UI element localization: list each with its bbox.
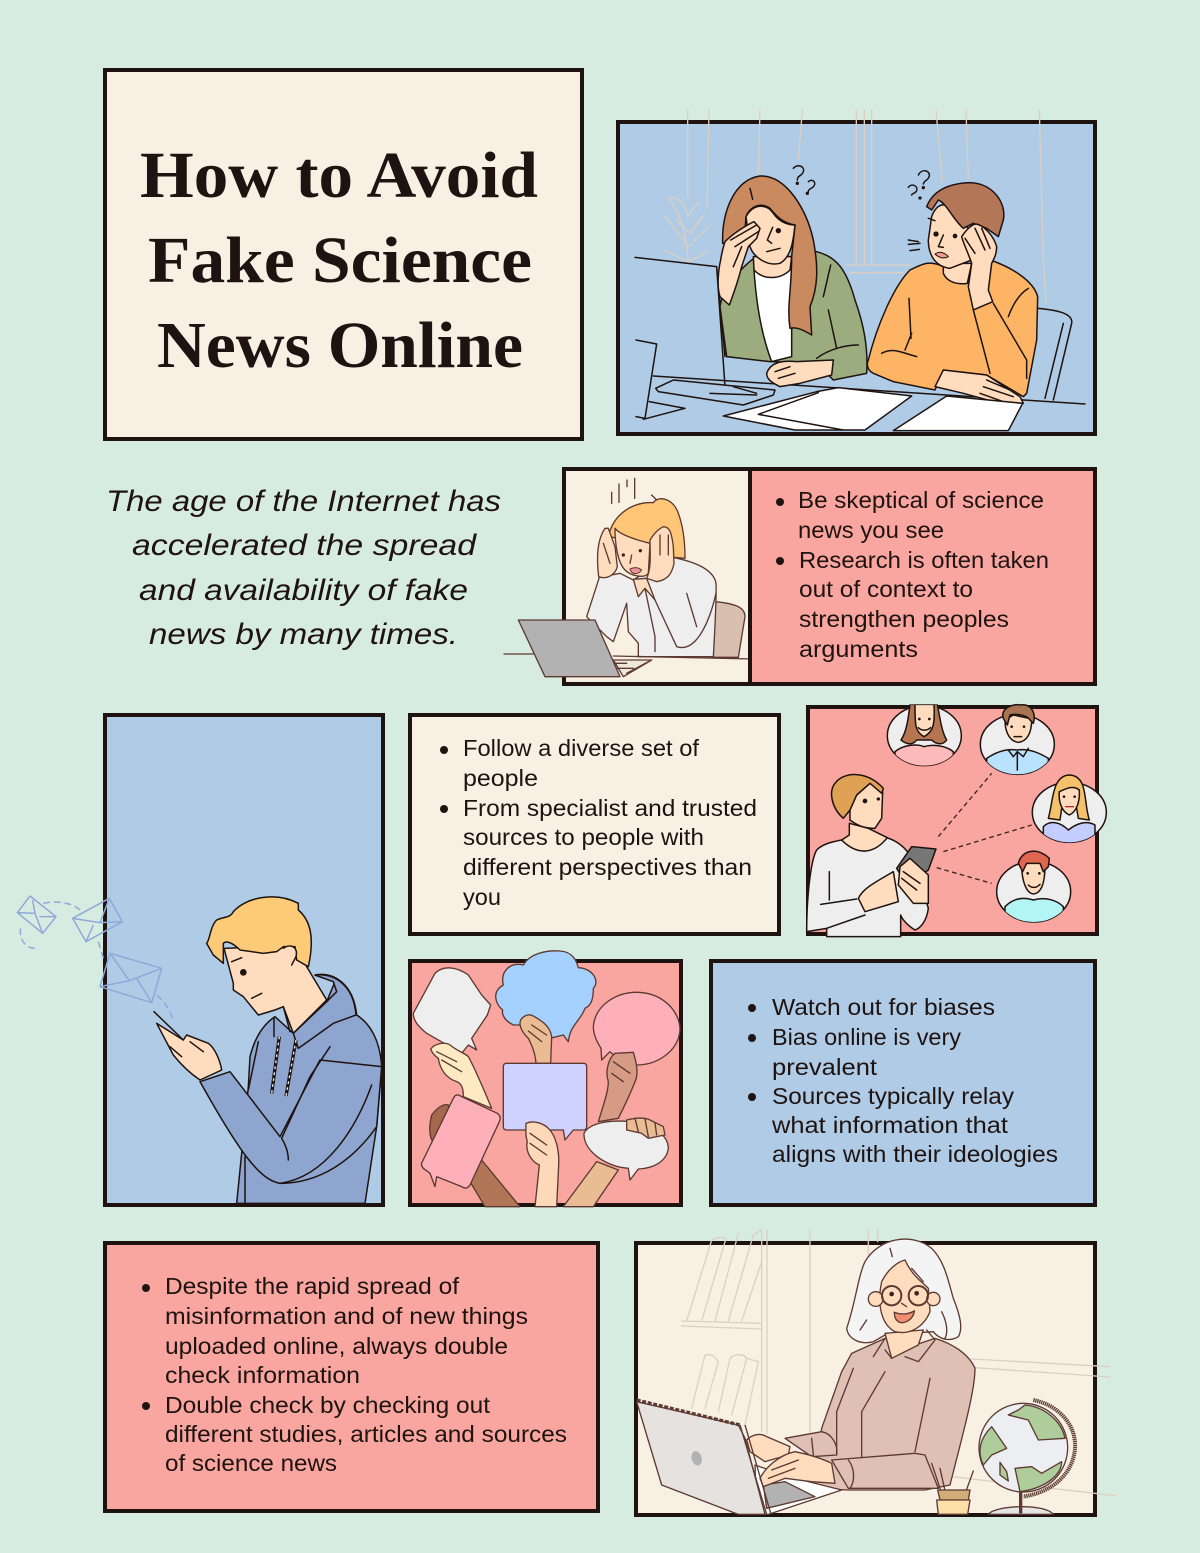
panel: biases bullets: Sources typically relay xyxy=(772,1083,1015,1109)
panel: diverse people bullets: Follow a diverse set of xyxy=(463,735,700,761)
intro text: news by many times. xyxy=(149,618,458,651)
panel: skeptical bullets xyxy=(750,469,1095,684)
speech bubble: blue cloud xyxy=(496,951,596,1042)
intro text: accelerated the spread xyxy=(132,529,477,562)
panel: double check bullets: of science news xyxy=(165,1450,337,1476)
panel: biases bullets: aligns with their ideologies xyxy=(772,1141,1058,1167)
title panel xyxy=(105,70,582,439)
panel: skeptical bullets: Be skeptical of science xyxy=(798,487,1044,513)
man with phone xyxy=(807,775,936,937)
panel: older woman at laptop with globe xyxy=(636,1230,1115,1515)
title xyxy=(140,139,538,382)
panel: stressed woman with laptop xyxy=(504,469,753,684)
panel: skeptical bullets: out of context to xyxy=(799,576,973,602)
avatar: blonde woman xyxy=(1032,775,1106,843)
keyboard and papers xyxy=(656,380,775,405)
older woman xyxy=(785,1239,975,1490)
title: News Online xyxy=(157,309,523,382)
intro text: The age of the Internet has xyxy=(106,485,501,518)
panel: diverse people bullets: sources to people with xyxy=(463,824,704,850)
speech bubble: white oval xyxy=(584,1121,668,1180)
panel: biases bullets xyxy=(711,961,1095,1205)
hands xyxy=(430,1015,637,1142)
avatar: red-haired man xyxy=(997,851,1071,925)
panel: biases bullets: what information that xyxy=(771,1112,1009,1138)
foreground hands xyxy=(526,1118,665,1207)
panel: raised speech bubbles xyxy=(410,951,681,1207)
panel: double check bullets: check information xyxy=(165,1362,360,1388)
speech bubble: pink rectangle xyxy=(421,1095,500,1188)
panel: double check bullets: Despite the rapid spread of xyxy=(165,1273,460,1299)
speech bubble: pink oval xyxy=(593,992,680,1065)
panel: boy with phone and envelopes xyxy=(17,715,383,1205)
panel: diverse people bullets xyxy=(410,715,779,934)
boy xyxy=(154,897,382,1203)
speech bubble: white xyxy=(413,968,491,1053)
panel: diverse people bullets: people xyxy=(463,765,538,791)
panel: biases bullets: Bias online is very xyxy=(772,1024,962,1050)
woman with long hair xyxy=(718,166,867,387)
panel: skeptical bullets: strengthen peoples xyxy=(799,606,1009,632)
panel: diverse people bullets: different perspectives than xyxy=(463,854,752,880)
panel: phone user connected to avatars xyxy=(807,704,1106,937)
panel: skeptical bullets: news you see xyxy=(798,517,944,543)
chair xyxy=(1038,308,1072,400)
title: Fake Science xyxy=(148,224,532,297)
panel: double check bullets: Double check by checking out xyxy=(165,1392,491,1418)
speech bubble: lavender xyxy=(503,1063,587,1140)
laptop xyxy=(504,620,753,677)
panel: diverse people bullets: From specialist and trusted xyxy=(463,795,757,821)
arms xyxy=(470,1160,618,1207)
laptop xyxy=(637,1400,842,1514)
title: How to Avoid xyxy=(140,139,538,212)
panel: double check bullets: different studies, articles and sources xyxy=(165,1421,567,1447)
man in orange sweater xyxy=(867,171,1038,403)
panel: confused couple illustration xyxy=(618,110,1095,434)
panel: biases bullets: prevalent xyxy=(772,1054,878,1080)
avatar: man in blue shirt xyxy=(980,705,1054,775)
panel: double check bullets: uploaded online, always double xyxy=(165,1333,508,1359)
panel: biases bullets: Watch out for biases xyxy=(772,994,995,1020)
panel: double check bullets xyxy=(105,1243,598,1511)
pencil cup xyxy=(932,1463,973,1514)
panel: skeptical bullets: arguments xyxy=(799,636,918,662)
panel: skeptical bullets: Research is often taken xyxy=(799,547,1049,573)
intro text: and availability of fake xyxy=(139,574,468,607)
icon: flying envelopes xyxy=(17,896,173,1021)
intro text xyxy=(106,485,501,651)
avatar: woman with brown hair xyxy=(887,704,961,768)
globe xyxy=(979,1400,1075,1514)
panel: double check bullets: misinformation and of new things xyxy=(165,1303,528,1329)
panel: diverse people bullets: you xyxy=(463,884,501,910)
stressed woman xyxy=(587,495,745,657)
